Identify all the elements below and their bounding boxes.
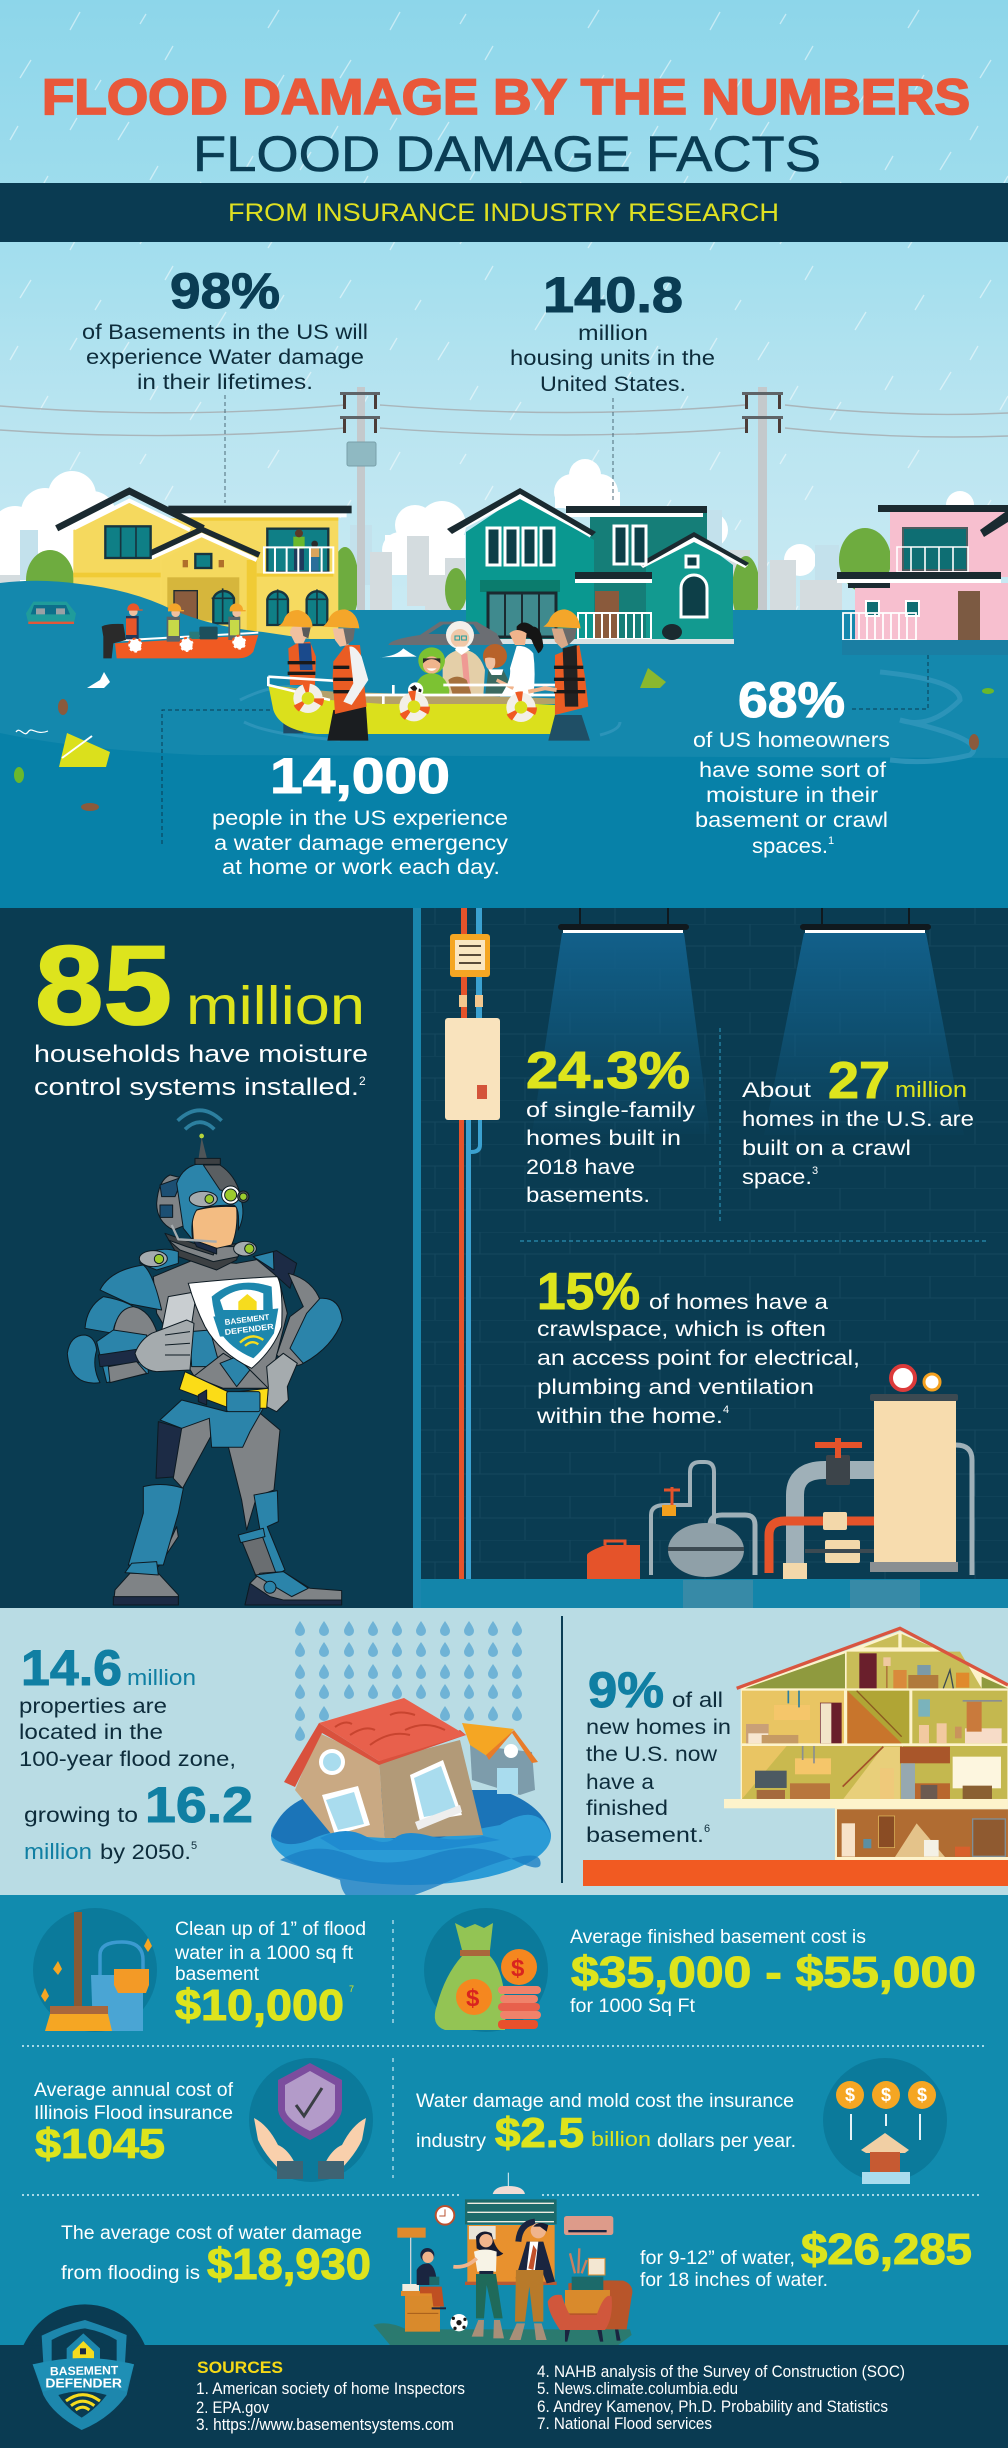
stat: 98%: experience Water damage xyxy=(86,346,364,369)
stat: 27 million xyxy=(742,1052,974,1189)
stat: 24.3%: 24.3% xyxy=(526,1042,690,1100)
right arm xyxy=(277,1273,342,1365)
bedroom and bathroom xyxy=(746,1691,1002,1743)
house cross-section xyxy=(724,1628,1008,1860)
stat: 14.6 and 16.2 million: million xyxy=(127,1665,196,1690)
stat: 140.8 million: 140.8 xyxy=(543,267,683,323)
woman xyxy=(453,2231,504,2338)
stat: $1045: Illinois Flood insurance xyxy=(34,2103,233,2124)
icon: money bag xyxy=(424,1908,548,2032)
panel: flood scene xyxy=(0,0,1008,908)
stat: 15%: of homes have a xyxy=(649,1291,828,1314)
robot mascot xyxy=(67,1110,342,1605)
icon: broom and bucket xyxy=(33,1908,157,2032)
stat: 14.6 and 16.2 million: 16.2 xyxy=(145,1777,253,1833)
stat: 85 million xyxy=(34,923,368,1101)
icon: coins over house: $ xyxy=(845,2085,855,2105)
boy and cabinet xyxy=(401,2248,446,2332)
stat: 140.8 million xyxy=(510,267,715,396)
chest shield: DEFENDER xyxy=(224,1322,274,1337)
stat: 68%: moisture in their xyxy=(706,784,878,807)
stat: 15%: an access point for electrical, xyxy=(537,1347,860,1370)
lamps xyxy=(532,908,964,1135)
left water mound xyxy=(0,581,360,650)
icon: raindrops xyxy=(295,1621,522,1741)
icon: money bag: $ xyxy=(466,1985,480,2012)
house: pink xyxy=(837,505,1008,655)
stat: 9%: new homes in xyxy=(586,1716,731,1739)
stat: 68%: 68% xyxy=(738,672,845,728)
pelvis xyxy=(160,1400,263,1447)
chest shield: BASEMENT xyxy=(224,1313,270,1327)
stat: $2.5 billion: Water damage and mold cost the insurance xyxy=(416,2091,794,2112)
stat: 68%: of US homeowners xyxy=(693,729,890,752)
house: yellow xyxy=(57,491,352,640)
stat: 9%: 9% xyxy=(588,1662,664,1718)
stat: 15%: plumbing and ventilation xyxy=(537,1376,814,1399)
torso xyxy=(153,1257,287,1388)
left arm xyxy=(100,1265,162,1310)
power lines and poles xyxy=(0,387,1008,660)
boat xyxy=(268,685,555,734)
stat: 140.8 million: United States. xyxy=(540,373,686,396)
basement water xyxy=(421,1579,1008,1608)
stat: $35,000 - $55,000: Average finished basement cost is xyxy=(570,1927,866,1948)
icon: money bag: $ xyxy=(511,1955,525,1982)
stat: 14.6 and 16.2 million: 5 xyxy=(191,1840,197,1852)
rescue boat: yellow with family xyxy=(268,609,590,741)
stat: $35,000 - $55,000: for 1000 Sq Ft xyxy=(570,1996,696,2017)
dashed leader lines xyxy=(162,395,928,845)
floating car xyxy=(26,602,76,624)
belt xyxy=(179,1372,268,1408)
stat: $1045 xyxy=(34,2080,234,2167)
logo: Basement Defender xyxy=(23,2304,145,2430)
shoulders xyxy=(140,1249,178,1270)
sources list: 5. News.climate.columbia.edu xyxy=(537,2379,738,2398)
stat: $26,285: for 18 inches of water. xyxy=(640,2270,828,2291)
stat: $26,285 xyxy=(640,2225,972,2291)
stat: 14,000: 14,000 xyxy=(270,748,450,804)
orange base bar xyxy=(583,1860,1008,1886)
icon: insurance shield and hands xyxy=(249,2058,373,2182)
stat: $10,000: Clean up of 1” of flood xyxy=(175,1919,366,1940)
stat: 9%: of all xyxy=(672,1689,723,1712)
plumbing equipment xyxy=(587,1366,972,1580)
tablet xyxy=(162,1292,197,1331)
head xyxy=(192,1206,237,1248)
stat: 98%: of Basements in the US will xyxy=(82,321,368,344)
trees xyxy=(26,528,891,624)
stat: 27 million: 27 xyxy=(828,1052,890,1110)
left leg xyxy=(156,1422,182,1478)
attic furniture xyxy=(859,1653,969,1688)
stat: $35,000 - $55,000 xyxy=(570,1927,976,2017)
stat: 14,000: at home or work each day. xyxy=(222,856,500,879)
left worker xyxy=(278,610,316,733)
stat: $2.5 billion: $2.5 xyxy=(495,2109,584,2156)
stat: $2.5 billion: industry xyxy=(416,2131,487,2152)
stat: 68%: basement or crawl xyxy=(695,809,888,832)
title: FLOOD DAMAGE FACTS xyxy=(193,126,821,182)
stat: 98%: in their lifetimes. xyxy=(137,371,313,394)
stat: 140.8 million: million xyxy=(578,322,648,345)
panel: moisture and crawl space xyxy=(0,908,1008,1608)
stat: 15%: 4 xyxy=(723,1404,729,1416)
soccer ball xyxy=(450,2314,468,2331)
stat: 14,000: people in the US experience xyxy=(212,807,508,830)
stat: $18,930: from flooding is xyxy=(61,2263,200,2284)
stat: 14.6 and 16.2 million: million xyxy=(24,1839,92,1864)
stat: 9%: basement. xyxy=(586,1824,704,1847)
pipes and water heater xyxy=(445,908,500,1580)
stat: 14,000 xyxy=(212,748,509,879)
stat: 14.6 and 16.2 million: 14.6 xyxy=(21,1640,122,1696)
house: teal xyxy=(447,488,749,644)
footer xyxy=(0,2304,1008,2448)
stat: 24.3% xyxy=(526,1042,696,1207)
stat: $1045: $1045 xyxy=(35,2120,165,2167)
subtitle band xyxy=(0,183,1008,242)
stat: 68%: have some sort of xyxy=(699,759,886,782)
stat: 85 million: households have moisture xyxy=(34,1041,368,1068)
sources list: 7. National Flood services xyxy=(537,2414,712,2433)
stat: 85 million: 2 xyxy=(359,1074,366,1088)
stat: 15%: 15% xyxy=(537,1263,640,1321)
family xyxy=(408,621,543,705)
stat: 98% xyxy=(82,263,368,394)
stat: 14.6 and 16.2 million: growing to xyxy=(24,1804,138,1827)
logo: Basement Defender: DEFENDER xyxy=(45,2377,122,2391)
subtitle band: FROM INSURANCE INDUSTRY RESEARCH xyxy=(228,199,779,227)
stat: 9%: finished xyxy=(586,1797,668,1820)
stat: 9%: have a xyxy=(586,1771,654,1794)
sources list: 3. https://www.basementsystems.com xyxy=(196,2415,454,2434)
panel: flood zone and finished basements xyxy=(0,1608,1008,1904)
stat: 24.3%: of single-family xyxy=(526,1099,696,1122)
stat: 27 million: homes in the U.S. are xyxy=(742,1108,974,1131)
stat: 85 million: million xyxy=(186,976,365,1036)
stat: 14.6 and 16.2 million: properties are xyxy=(19,1695,167,1718)
stat: $2.5 billion xyxy=(416,2091,796,2156)
floating debris xyxy=(14,668,994,811)
stat: 14.6 and 16.2 million xyxy=(19,1640,253,1864)
icon: coins over house: $ xyxy=(917,2085,927,2105)
flood water xyxy=(0,610,1008,908)
sources list: SOURCES xyxy=(197,2358,283,2377)
sources list: 6. Andrey Kamenov, Ph.D. Probability and Statistics xyxy=(537,2397,888,2416)
sources list: 2. EPA.gov xyxy=(196,2398,269,2417)
stat: 15%: within the home. xyxy=(536,1405,723,1428)
stat: 27 million: 3 xyxy=(812,1165,818,1177)
man xyxy=(509,2222,555,2340)
living room and kitchen xyxy=(755,1746,1001,1799)
sources list xyxy=(196,2358,905,2434)
stat: 27 million: built on a crawl xyxy=(742,1137,911,1160)
armchair xyxy=(548,2248,632,2342)
stat: 68%: 1 xyxy=(828,835,834,847)
chest shield xyxy=(188,1277,282,1368)
sources list: 1. American society of home Inspectors xyxy=(196,2379,465,2398)
clouds and skyline xyxy=(0,459,974,624)
stat: 24.3%: 2018 have xyxy=(526,1156,635,1179)
stat: 85 million: 85 xyxy=(35,923,172,1048)
icon: coins over house xyxy=(823,2058,947,2184)
stat: 14.6 and 16.2 million: 100-year flood zone, xyxy=(19,1748,236,1771)
stat: 14.6 and 16.2 million: located in the xyxy=(19,1721,163,1744)
back house xyxy=(462,1723,538,1795)
wifi icon xyxy=(178,1110,222,1129)
stat: $2.5 billion: dollars per year. xyxy=(657,2131,796,2152)
stat: $10,000: $10,000 xyxy=(175,1981,344,2030)
stat: 9%: 6 xyxy=(704,1823,710,1835)
stat: 14,000: a water damage emergency xyxy=(214,832,509,855)
sources list: 4. NAHB analysis of the Survey of Construction (SOC) xyxy=(537,2362,905,2381)
stat: 9% xyxy=(586,1662,731,1847)
title xyxy=(42,69,970,182)
stat: $35,000 - $55,000: $35,000 - $55,000 xyxy=(571,1948,976,1997)
rescue boat: orange xyxy=(102,603,258,658)
panel: costs xyxy=(0,1895,1008,2345)
stat: 98%: 98% xyxy=(170,263,280,319)
stat: $1045: Average annual cost of xyxy=(34,2080,234,2101)
stat: 27 million: million xyxy=(895,1077,967,1102)
stat: 85 million: control systems installed. xyxy=(34,1074,359,1101)
middle worker xyxy=(323,609,368,741)
neck and collar xyxy=(165,1233,240,1270)
logo: Basement Defender: BASEMENT xyxy=(50,2363,119,2378)
stat: $10,000: 7 xyxy=(349,1984,354,1994)
stat: 14.6 and 16.2 million: by 2050. xyxy=(100,1841,191,1864)
stat: $26,285: for 9-12” of water, xyxy=(640,2248,795,2269)
stat: 68%: spaces. xyxy=(752,835,828,858)
stat: 140.8 million: housing units in the xyxy=(510,347,715,370)
submerged car xyxy=(388,622,503,645)
stat: $18,930: $18,930 xyxy=(207,2240,371,2289)
basement contents xyxy=(842,1816,1005,1857)
stat: 15%: crawlspace, which is often xyxy=(537,1318,826,1341)
title: FLOOD DAMAGE BY THE NUMBERS xyxy=(42,69,970,125)
stat: $10,000: basement xyxy=(175,1964,260,1985)
hand xyxy=(135,1320,194,1372)
stat: 24.3%: basements. xyxy=(526,1184,650,1207)
stat: 9%: the U.S. now xyxy=(586,1743,718,1766)
flooded house illustration xyxy=(271,1698,551,1904)
stat: $10,000: water in a 1000 sq ft xyxy=(174,1943,354,1964)
stat: 68% xyxy=(693,672,890,858)
stat: 27 million: space. xyxy=(742,1166,812,1189)
stat: $18,930 xyxy=(61,2223,371,2289)
stat: 15% xyxy=(536,1263,860,1428)
illustration: family in flooded room xyxy=(373,2173,632,2345)
icon: coins over house: $ xyxy=(881,2085,891,2105)
stat: $10,000 xyxy=(174,1919,366,2030)
back leg and right leg xyxy=(228,1413,280,1530)
stat: $26,285: $26,285 xyxy=(801,2225,972,2274)
stat: 27 million: About xyxy=(742,1079,811,1102)
stat: $18,930: The average cost of water damage xyxy=(61,2223,362,2244)
stat: $2.5 billion: billion xyxy=(591,2129,651,2151)
right worker xyxy=(528,609,590,741)
stat: 24.3%: homes built in xyxy=(526,1127,681,1150)
